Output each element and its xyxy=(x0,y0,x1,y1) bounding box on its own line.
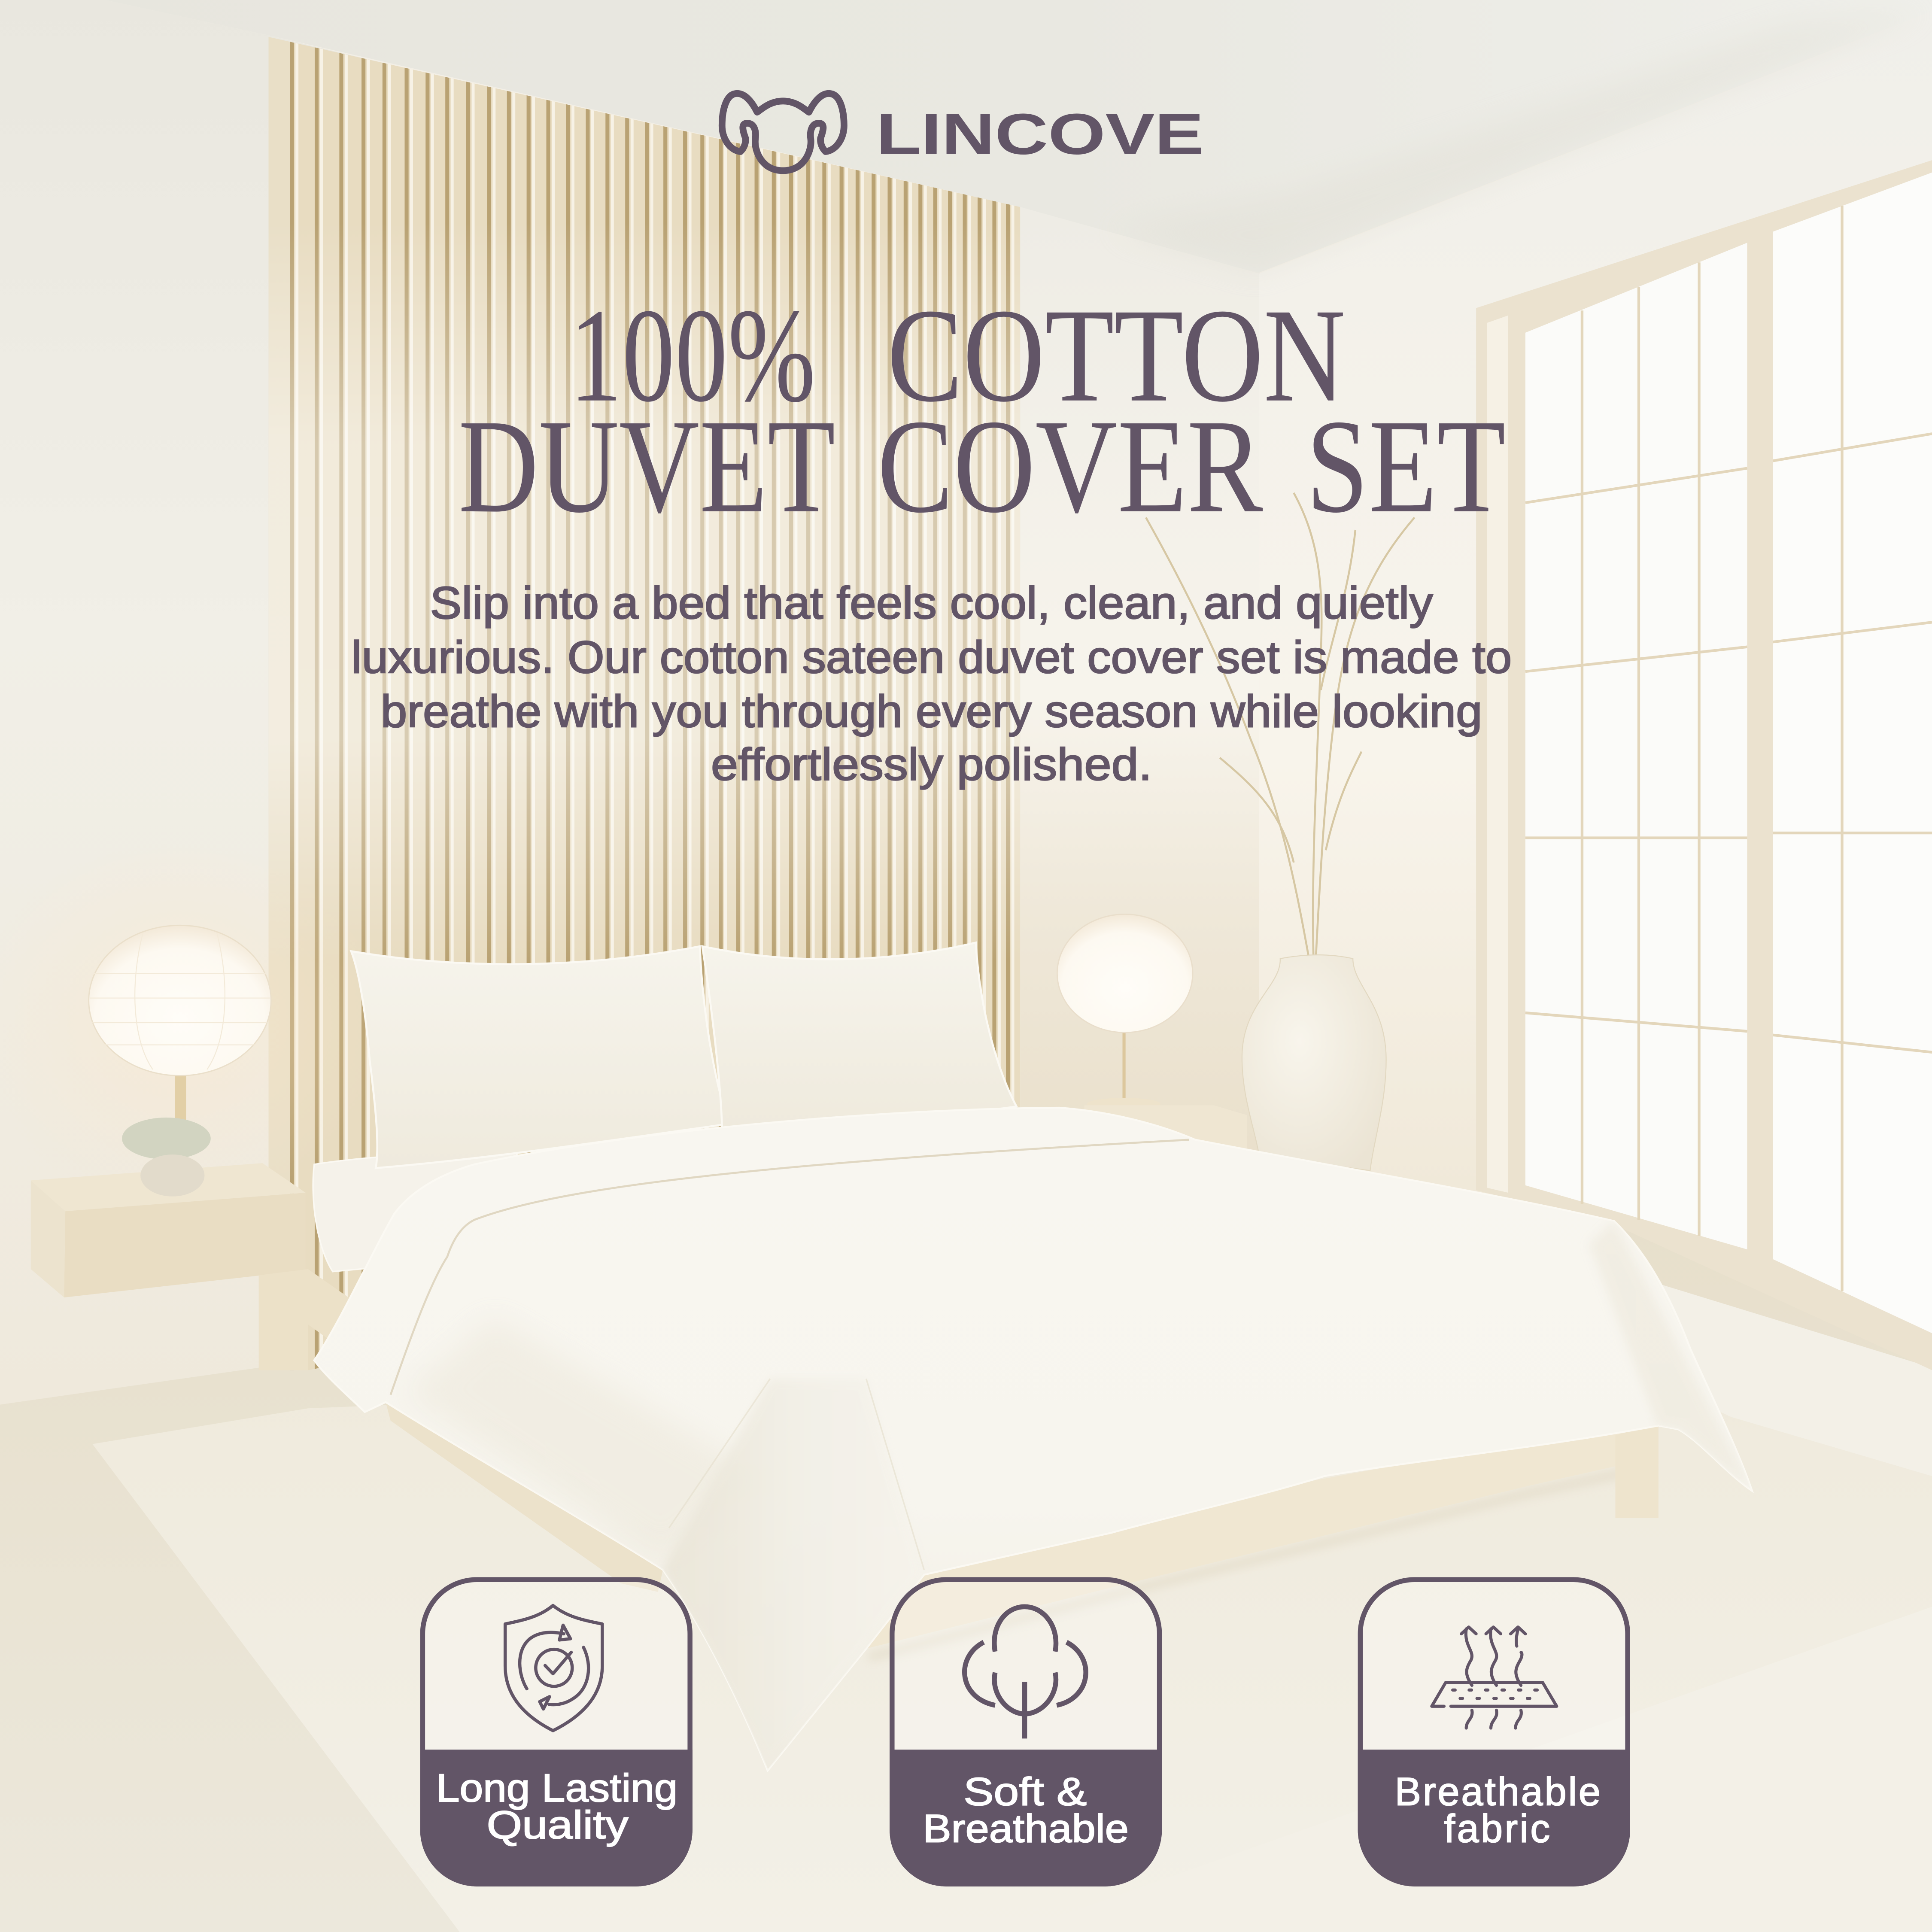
label: Breathable xyxy=(923,1807,1129,1850)
description paragraph: Slip into a bed that feels cool, clean, and quietly xyxy=(430,577,1433,629)
logo: Lincove xyxy=(722,94,1204,170)
bed frame front rail and leg xyxy=(386,1402,1659,1657)
slatted wood headboard panel xyxy=(252,0,1029,1380)
ceiling corner shadow xyxy=(1109,11,1932,273)
label: Soft & xyxy=(963,1770,1087,1814)
left lamp glow xyxy=(0,838,389,1207)
title: DUVET xyxy=(459,392,835,541)
right nightstand xyxy=(1084,1105,1247,1148)
duvet shading xyxy=(407,1221,1752,1771)
title: COTTON xyxy=(887,281,1346,430)
title: COVER xyxy=(877,392,1264,541)
description paragraph: luxurious. Our cotton sateen duvet cover set is made to xyxy=(351,632,1512,683)
duvet fold line xyxy=(391,1140,1189,1395)
floor xyxy=(0,1214,1932,1932)
label: Breathable xyxy=(1395,1770,1601,1814)
label: Long Lasting xyxy=(436,1766,677,1810)
badge: soft and breathable xyxy=(890,1580,1162,1886)
left pillow xyxy=(351,946,729,1168)
fitted sheet xyxy=(313,1152,517,1272)
label: Quality xyxy=(487,1803,629,1847)
title: 100% xyxy=(569,281,816,430)
label: fabric xyxy=(1444,1807,1550,1850)
description paragraph: effortlessly polished. xyxy=(711,739,1152,790)
branches xyxy=(1146,493,1415,956)
right lamp xyxy=(1057,914,1193,1110)
icon: cotton boll xyxy=(965,1607,1086,1738)
left floating nightstand xyxy=(31,1163,306,1297)
label xyxy=(1395,1770,1601,1850)
ceiling xyxy=(0,0,1932,273)
title: SET xyxy=(1306,392,1506,541)
window glass panels xyxy=(1487,173,1932,1333)
label xyxy=(923,1770,1129,1850)
right wall xyxy=(1259,11,1932,1374)
rug xyxy=(92,1355,1932,1932)
label xyxy=(436,1766,677,1847)
right floor xyxy=(986,1282,1932,1932)
icon: air through fabric xyxy=(1432,1627,1557,1728)
left wall xyxy=(0,0,1263,1405)
floor vase xyxy=(1242,955,1386,1170)
icon: shield with cycle check xyxy=(505,1605,602,1731)
description paragraph xyxy=(351,577,1512,790)
brand name: LINCOVE xyxy=(876,102,1204,167)
duvet xyxy=(314,1108,1752,1771)
flower vase xyxy=(122,1118,211,1197)
window frame xyxy=(1476,160,1932,1370)
description paragraph: breathe with you through every season while looking xyxy=(381,686,1482,737)
bed frame left rail xyxy=(259,1269,370,1370)
badge: breathable fabric xyxy=(1358,1580,1630,1886)
icon: bear head xyxy=(722,94,844,170)
left lamp xyxy=(89,925,271,1127)
wall between panel and corner xyxy=(1020,207,1259,1183)
title xyxy=(459,281,1506,541)
right pillow xyxy=(702,942,1017,1127)
badge: long lasting quality xyxy=(420,1580,693,1886)
